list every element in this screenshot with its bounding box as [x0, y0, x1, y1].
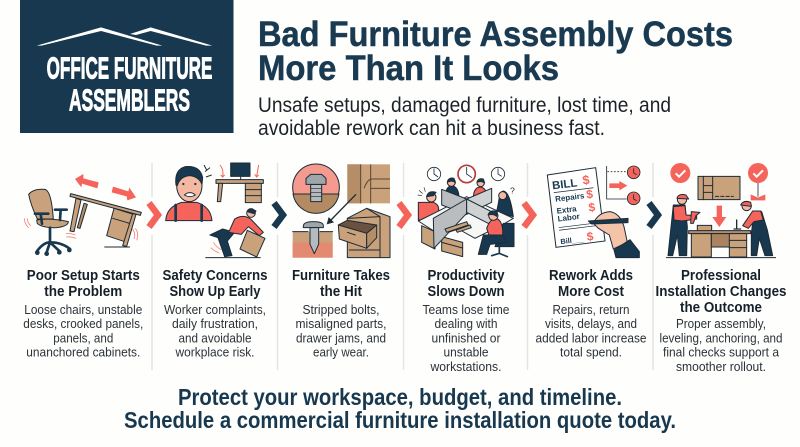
title: Bad Furniture Assembly Costs: [258, 15, 733, 54]
logo: Office Furniture Assemblers: ASSEMBLERS: [69, 83, 190, 118]
step 1 text: Poor Setup Starts the Problem: unanchored cabinets.: [26, 344, 140, 360]
call to action: Protect your workspace, budget, and timeline.: [178, 384, 622, 410]
icon: team losing time in cubicles: [418, 165, 515, 257]
step 5 text: Rework Adds More Cost: Repairs, return: [552, 302, 630, 317]
chevron arrow 1: [149, 203, 158, 227]
chevron arrow 2: [274, 203, 283, 227]
step 4 text: Productivity Slows Down: Slows Down: [428, 284, 504, 300]
call to action: Schedule a commercial furniture installation quote today.: [124, 407, 676, 433]
step 5 text: Rework Adds More Cost: total spend.: [560, 344, 622, 360]
step 3 text: Furniture Takes the Hit: [292, 268, 390, 360]
icon: bill and rising costs: BILL: [552, 177, 578, 192]
subtitle: avoidable rework can hit a business fast.: [258, 117, 605, 140]
step 6 text: Professional Installation Changes the Outcome: Installation Changes: [656, 284, 786, 300]
icon: worried worker, desk and falling worker: [166, 163, 265, 258]
step 2 text: Safety Concerns Show Up Early: and avoidable: [178, 330, 252, 346]
step 3 text: Furniture Takes the Hit: drawer jams, and: [296, 330, 386, 346]
step 4 text: Productivity Slows Down: unstable: [444, 344, 488, 360]
icon: professional installers at work: [666, 163, 776, 258]
step 4 text: Productivity Slows Down: Teams lose time: [422, 302, 510, 317]
step 4 text: Productivity Slows Down: [422, 268, 510, 374]
step 6 text: Professional Installation Changes the Outcome: [656, 268, 786, 374]
step 2 text: Safety Concerns Show Up Early: Show Up Early: [170, 284, 260, 300]
step 1 text: Poor Setup Starts the Problem: [23, 268, 143, 360]
step 5 text: Rework Adds More Cost: [536, 268, 646, 360]
step 1 text: Poor Setup Starts the Problem: desks, crooked panels,: [23, 316, 143, 331]
step 3 text: Furniture Takes the Hit: early wear.: [313, 344, 369, 360]
step 1 text: Poor Setup Starts the Problem: Poor Setup Starts: [27, 268, 140, 284]
icon: bolts, misaligned panel, jammed drawer: [293, 164, 390, 258]
call to action: [124, 384, 676, 433]
step 5 text: Rework Adds More Cost: Rework Adds: [549, 268, 633, 284]
step 2 text: Safety Concerns Show Up Early: Safety Concerns: [162, 268, 268, 284]
step 3 text: Furniture Takes the Hit: misaligned parts,: [296, 316, 386, 331]
subtitle: [258, 94, 671, 140]
step 6 text: Professional Installation Changes the Outcome: final checks support a: [663, 344, 780, 360]
step 1 text: Poor Setup Starts the Problem: panels, and: [53, 330, 113, 346]
icon: bill and rising costs: $: [582, 173, 590, 188]
step 4 text: Productivity Slows Down: Productivity: [428, 268, 504, 284]
step 6 text: Professional Installation Changes the Outcome: leveling, anchoring, and: [660, 330, 782, 346]
step 3 text: Furniture Takes the Hit: Furniture Takes: [292, 268, 390, 284]
step 6 text: Professional Installation Changes the Outcome: Professional: [681, 268, 761, 284]
step 6 text: Professional Installation Changes the Outcome: the Outcome: [680, 300, 762, 316]
step 5 text: Rework Adds More Cost: visits, delays, and: [545, 316, 637, 331]
icon: bill and rising costs: $: [588, 200, 596, 215]
icon: bill and rising costs: Labor: [557, 212, 580, 224]
step 4 text: Productivity Slows Down: dealing with: [434, 316, 498, 331]
subtitle: Unsafe setups, damaged furniture, lost time, and: [258, 94, 671, 117]
title: [258, 15, 733, 88]
step 5 text: Rework Adds More Cost: More Cost: [558, 284, 624, 300]
icon: bill and rising costs: $: [586, 229, 595, 244]
step 1 text: Poor Setup Starts the Problem: Loose chairs, unstable: [24, 302, 142, 317]
icon: bill and rising costs: Extra: [556, 204, 578, 216]
step 2 text: Safety Concerns Show Up Early: workplace risk.: [175, 344, 254, 360]
icon: bill and rising costs: [547, 166, 640, 258]
step 2 text: Safety Concerns Show Up Early: Worker complaints,: [164, 302, 266, 317]
logo: Office Furniture Assemblers: [20, 0, 234, 133]
chevron arrow 3: [399, 203, 408, 227]
step 5 text: Rework Adds More Cost: added labor increase: [536, 330, 646, 346]
step 4 text: Productivity Slows Down: workstations.: [430, 359, 502, 374]
icon: bill and rising costs: $: [585, 187, 594, 202]
title: More Than It Looks: [258, 49, 559, 88]
step 3 text: Furniture Takes the Hit: the Hit: [320, 284, 362, 300]
icon: wobbly chair and tilted desk: [25, 174, 141, 256]
chevron arrow 5: [649, 203, 658, 227]
icon: bill and rising costs: Bill___: [560, 234, 585, 246]
chevron arrow 4: [524, 203, 533, 227]
icon: bill and rising costs: Repairs: [555, 191, 585, 204]
icon: team losing time in cubicles: ?: [510, 185, 515, 195]
step 6 text: Professional Installation Changes the Outcome: smoother rollout.: [676, 359, 766, 374]
step 6 text: Professional Installation Changes the Outcome: Proper assembly,: [676, 316, 766, 331]
logo: Office Furniture Assemblers: OFFICE FURNITURE: [47, 51, 212, 86]
step 2 text: Safety Concerns Show Up Early: daily frustration,: [172, 316, 258, 331]
step 4 text: Productivity Slows Down: unfinished or: [432, 330, 501, 346]
step 3 text: Furniture Takes the Hit: Stripped bolts,: [302, 302, 380, 317]
step 2 text: Safety Concerns Show Up Early: [162, 268, 268, 360]
step 1 text: Poor Setup Starts the Problem: the Problem: [44, 284, 122, 300]
